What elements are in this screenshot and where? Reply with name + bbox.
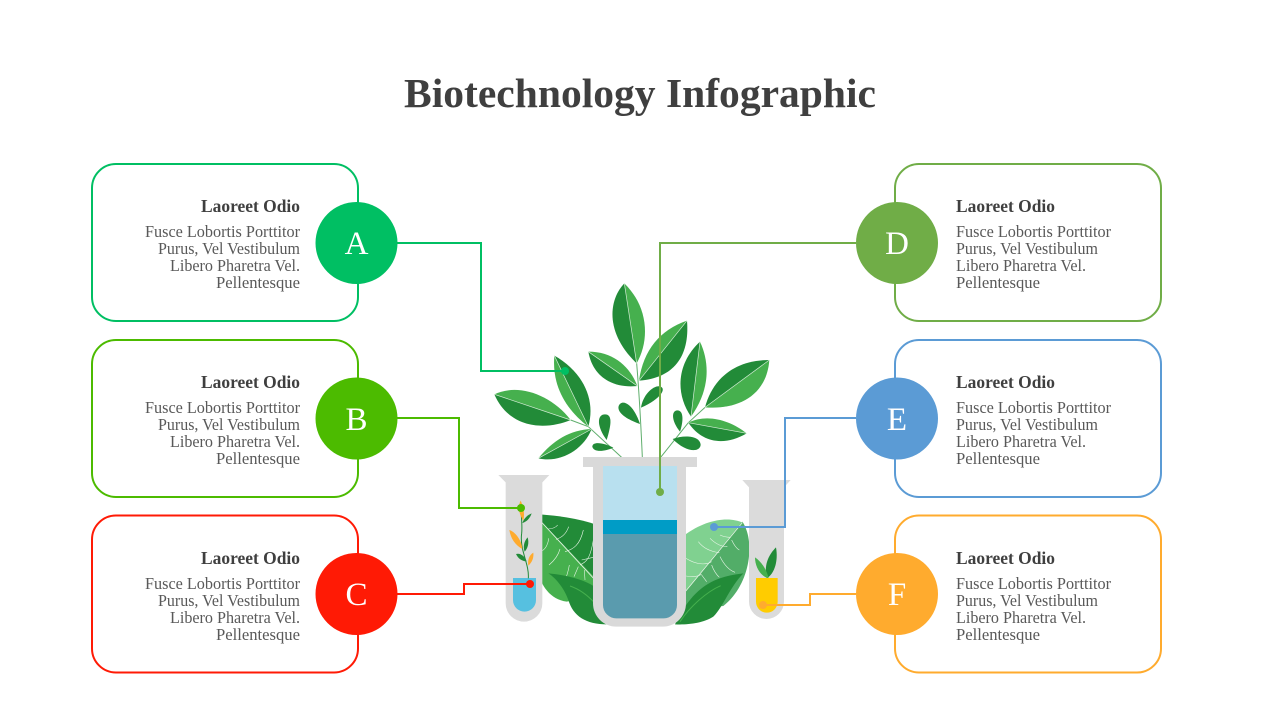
panel: C: [92, 516, 358, 672]
title: Biotechnology Infographic: [404, 70, 876, 116]
connector F: [759, 594, 856, 609]
badge C: C: [345, 577, 368, 613]
connector D: [656, 243, 856, 496]
panel: F: [895, 516, 1161, 672]
badge D: D: [885, 226, 909, 262]
badge B: B: [345, 402, 368, 438]
panel: B: Laoreet Odio: [201, 372, 300, 392]
panel: E: Laoreet Odio: [956, 372, 1055, 392]
panel: F: Pellentesque: [956, 625, 1040, 644]
beaker: [583, 457, 697, 627]
left test tube: [498, 475, 549, 622]
right test tube: [742, 480, 791, 619]
badge E: [856, 378, 938, 460]
panel: F: Fusce Lobortis Porttitor: [956, 574, 1111, 593]
panel: C: Fusce Lobortis Porttitor: [145, 574, 300, 593]
panel: A: [92, 164, 358, 321]
panel: A: Laoreet Odio: [201, 196, 300, 216]
badge B: [316, 378, 398, 460]
panel: C: Laoreet Odio: [201, 548, 300, 568]
panel: E: Purus, Vel Vestibulum: [956, 415, 1098, 434]
connector A: [397, 243, 569, 375]
panel: B: [92, 340, 358, 497]
panel: E: Pellentesque: [956, 449, 1040, 468]
panel: B: Fusce Lobortis Porttitor: [145, 398, 300, 417]
right back leaf: [683, 520, 749, 610]
panel: E: Fusce Lobortis Porttitor: [956, 398, 1111, 417]
panel: F: Libero Pharetra Vel.: [956, 608, 1086, 627]
badge F: [856, 553, 938, 635]
panel: C: Pellentesque: [216, 625, 300, 644]
badge D: [856, 202, 938, 284]
panel: D: Fusce Lobortis Porttitor: [956, 222, 1111, 241]
panel: B: Libero Pharetra Vel.: [170, 432, 300, 451]
badge F: F: [888, 577, 906, 613]
central illustration: plant and test tubes: [494, 283, 791, 627]
panel: E: Libero Pharetra Vel.: [956, 432, 1086, 451]
panel: F: Laoreet Odio: [956, 548, 1055, 568]
badge A: A: [345, 226, 369, 262]
plant leaves: [494, 283, 769, 459]
front dark leaves: [548, 573, 743, 624]
badge E: E: [887, 402, 907, 438]
badge A: [316, 202, 398, 284]
beaker, tubes and back leaves: [498, 457, 791, 627]
panel: D: Pellentesque: [956, 273, 1040, 292]
panel: C: Libero Pharetra Vel.: [170, 608, 300, 627]
panel: E: [895, 340, 1161, 497]
panel: A: Fusce Lobortis Porttitor: [145, 222, 300, 241]
panel: D: Laoreet Odio: [956, 196, 1055, 216]
panel: D: [895, 164, 1161, 321]
connector C: [397, 580, 534, 594]
panel: C: Purus, Vel Vestibulum: [158, 591, 300, 610]
badge C: [316, 553, 398, 635]
connector E: [710, 418, 856, 531]
panel: D: Libero Pharetra Vel.: [956, 256, 1086, 275]
panel: A: Libero Pharetra Vel.: [170, 256, 300, 275]
panel: B: Purus, Vel Vestibulum: [158, 415, 300, 434]
panel: B: Pellentesque: [216, 449, 300, 468]
left back leaf: [533, 514, 597, 602]
panel: A: Purus, Vel Vestibulum: [158, 239, 300, 258]
panel: F: Purus, Vel Vestibulum: [956, 591, 1098, 610]
panel: A: Pellentesque: [216, 273, 300, 292]
panel: D: Purus, Vel Vestibulum: [956, 239, 1098, 258]
connector B: [397, 418, 525, 512]
